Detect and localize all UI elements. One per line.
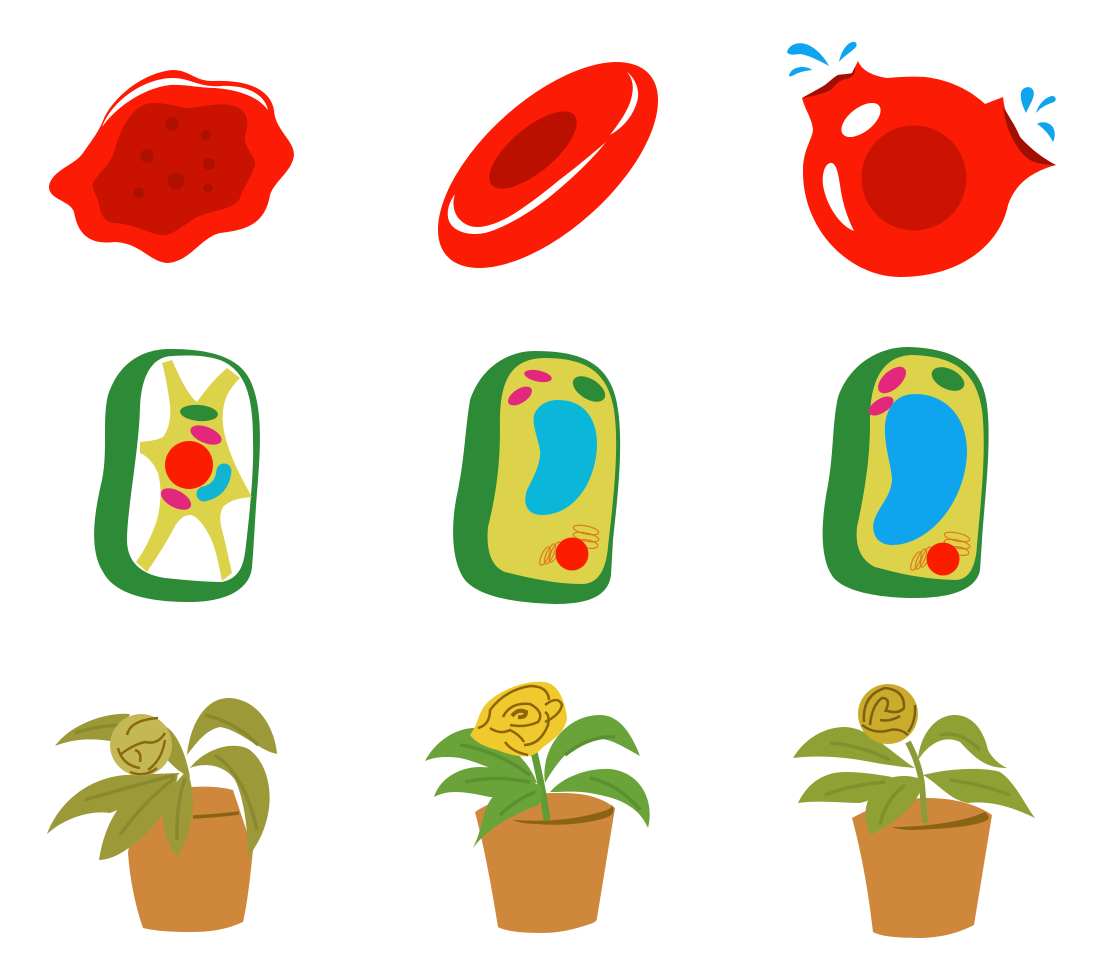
golgi and nucleus: [909, 530, 971, 572]
healthy plant cell: [453, 351, 620, 604]
crenated red blood cell: [49, 70, 294, 263]
pot: [475, 793, 615, 933]
leaf veins: [75, 715, 258, 840]
leaves: [47, 698, 277, 860]
soil: [513, 805, 614, 825]
turgid plant cell: [823, 347, 989, 598]
icon: water drops right: [1021, 87, 1056, 142]
leaves: [425, 715, 650, 848]
leaves: [793, 715, 1035, 835]
dull yellow bud: [858, 684, 918, 744]
intermediate plant in pot: [793, 684, 1035, 938]
pot: [852, 798, 992, 938]
plasmolysed plant cell: [94, 349, 260, 602]
leaf veins: [825, 734, 1010, 825]
wilted plant in pot: [47, 698, 277, 932]
yellow rose: [470, 682, 567, 756]
wilted bud: [110, 714, 172, 776]
healthy plant in pot: [425, 682, 650, 933]
pot: [128, 787, 253, 932]
leaf veins: [460, 737, 640, 815]
soil: [892, 812, 989, 830]
golgi and nucleus: [538, 523, 600, 567]
icon: water drops left: [787, 42, 857, 76]
stem: [908, 742, 925, 823]
swollen bursting red blood cell: [787, 42, 1056, 277]
normal red blood cell: [403, 26, 693, 304]
stem: [534, 752, 547, 820]
